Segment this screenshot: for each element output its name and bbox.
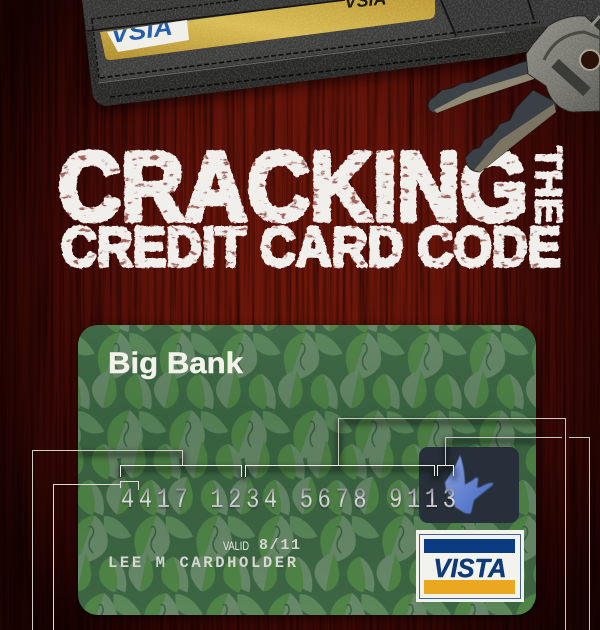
valid label: VALID — [223, 541, 249, 553]
gold credit card in pocket: VSIA — [109, 14, 174, 49]
callout: check digit bracket — [438, 466, 454, 476]
Vista logo: VISTA — [434, 553, 506, 583]
callout: major industry bracket — [54, 482, 138, 630]
wallet — [82, 0, 600, 111]
card number: 4417 1234 5678 9113 — [121, 485, 456, 516]
callout: bank identifier line — [32, 450, 182, 630]
icon: dove hologram — [445, 455, 493, 514]
hologram panel with bird — [419, 447, 519, 523]
callout: first bracket — [120, 466, 242, 477]
cardholder name: LEE M CARDHOLDER — [108, 554, 297, 572]
credit card — [78, 325, 538, 619]
key head — [526, 16, 600, 112]
callout line shadows — [78, 422, 536, 481]
title word: The: THE — [528, 146, 569, 224]
callout: check digit line — [446, 438, 590, 630]
bank name: Big Bank — [108, 347, 243, 380]
callout: account number line — [338, 418, 566, 630]
callout: account number bracket — [246, 466, 434, 477]
title line: Cracking: CRACKING — [58, 132, 528, 241]
expiry date: 8/11 — [259, 537, 300, 554]
title — [58, 132, 569, 278]
key blade: lower — [465, 90, 556, 172]
key blade: upper — [428, 60, 537, 113]
keys — [428, 16, 600, 172]
Vista logo — [416, 530, 524, 602]
gold credit card in pocket — [100, 0, 435, 60]
